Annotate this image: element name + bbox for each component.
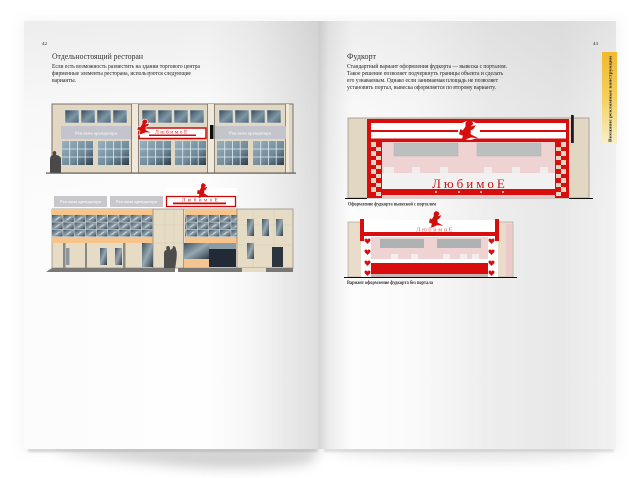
red restaurant sign [137, 119, 206, 138]
body text right: Такое решение позволяет подчеркнуть границы объекта и сделать [347, 70, 503, 77]
body text right [347, 63, 508, 91]
logo wordmark: ЛюбимоЕ [432, 176, 508, 191]
people silhouette [50, 151, 61, 173]
body text right: установить портал, вывеска оформляется по второму варианту. [347, 84, 497, 91]
steps [46, 268, 293, 272]
caption: without portal: Вариант оформление фудкорта без портала [347, 281, 434, 286]
body text left: варианты. [52, 78, 77, 84]
tenant ad banner left [61, 126, 131, 139]
lower windows [62, 141, 284, 165]
page number 42: 42 [42, 41, 47, 46]
page number 43: 43 [593, 41, 599, 46]
tenant ad banner left: Реклама арендатора [75, 130, 118, 136]
heading: standalone restaurant: Отдельностоящий ресторан [52, 51, 143, 61]
section tab [602, 52, 617, 144]
white fascia bands [371, 123, 566, 138]
interior [371, 237, 488, 259]
mall building illustration [46, 209, 293, 272]
food court with portal illustration [345, 115, 593, 199]
black side sign [210, 125, 214, 139]
ground floor bays [63, 243, 236, 268]
portal interior [382, 142, 555, 173]
body text left [52, 64, 200, 84]
red posts and beam [360, 219, 499, 241]
tenant ad banner right [215, 126, 286, 139]
tenant ad boxes: Реклама арендатора [60, 199, 102, 204]
body text left: Если есть возможность разместить на здании торгового центра [52, 64, 200, 70]
black side sign [571, 115, 574, 143]
sign dots [435, 191, 504, 193]
restaurant roof sign [166, 183, 237, 206]
heading: food court: Фудкорт [347, 51, 376, 61]
right block windows [247, 219, 283, 267]
logo figure [458, 120, 480, 141]
body text left: фирменные элементы ресторана, используются следующие [52, 70, 191, 77]
right page [320, 21, 617, 449]
hearts [364, 238, 494, 276]
brick columns [371, 142, 566, 196]
logo figure [429, 211, 443, 228]
tenant ad banner right: Реклама арендатора [229, 130, 272, 136]
restaurant roof sign: ЛюбимоЕ [182, 198, 220, 204]
red portal [367, 119, 569, 198]
logo wordmark: ЛюбимоЕ [416, 226, 454, 234]
red restaurant sign: ЛюбимоЕ [155, 128, 189, 136]
tenant ad boxes [54, 196, 163, 207]
section tab: Внешние рекламные конструкции [608, 56, 612, 142]
left page [24, 21, 320, 449]
body text right: Стандартный вариант оформления фудкорта — вывеска с порталом. [347, 63, 508, 70]
people silhouette [164, 246, 177, 269]
tenant ad boxes: Реклама арендатора [116, 199, 158, 204]
body text right: его узнаваемым. Однако если занимаемая площадь не позволяет [347, 78, 498, 84]
upper windows [65, 110, 281, 123]
caption: with portal: Оформление фудкорта вывеской с порталом [348, 202, 437, 208]
facade illustration 1 [46, 104, 296, 174]
food court without portal illustration [344, 211, 517, 278]
